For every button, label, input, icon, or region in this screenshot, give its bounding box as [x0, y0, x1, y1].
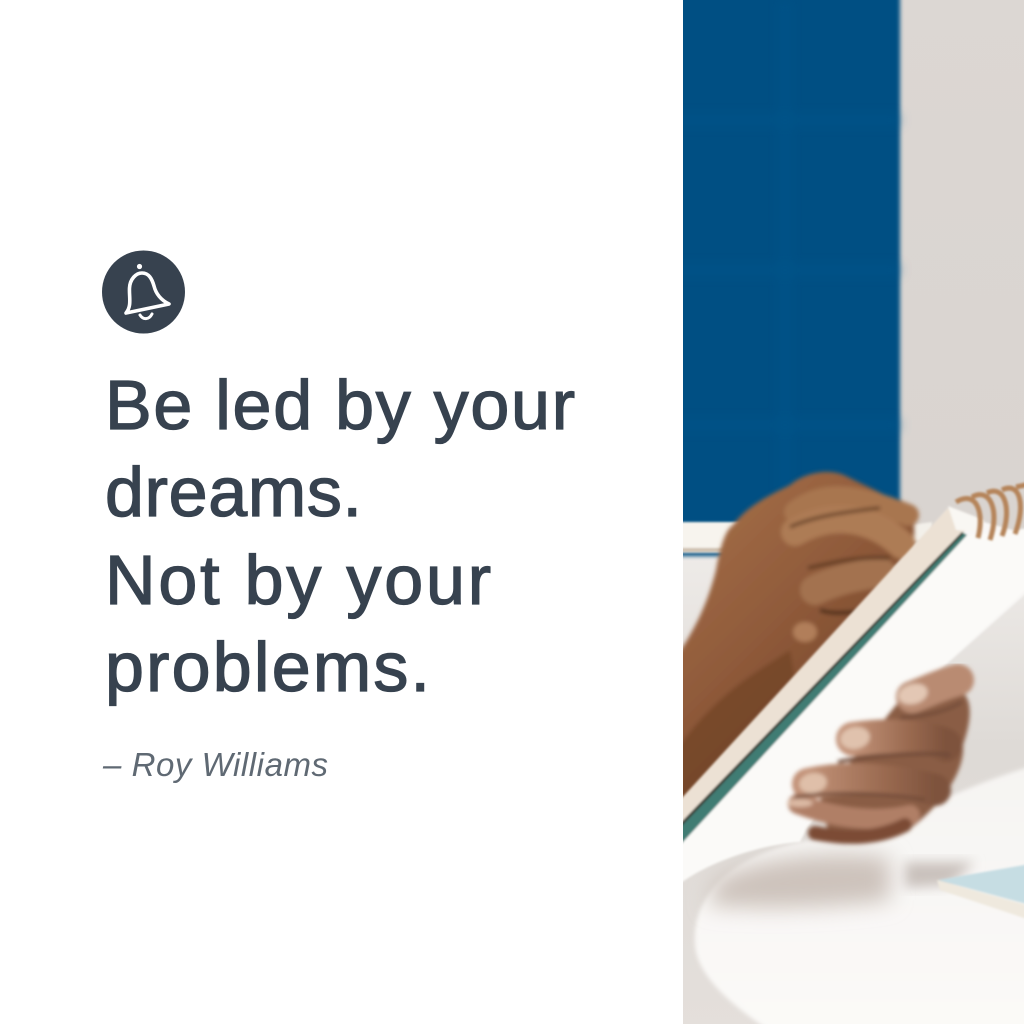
- quote heading: [105, 366, 575, 706]
- quote heading: problems.: [105, 628, 430, 706]
- photo backdrop: wall and blue panel: [670, 0, 1024, 1024]
- photo: hands writing in a notebook: [670, 0, 1024, 1024]
- notebook body: [670, 506, 1024, 890]
- quote heading: dreams.: [105, 453, 362, 531]
- round white table: [695, 764, 1024, 1024]
- index finger: [795, 497, 908, 515]
- writing hand: [670, 472, 915, 815]
- attribution: – Roy Williams: [102, 746, 328, 783]
- small notebook on table: [937, 864, 1024, 920]
- quote heading: Be led by your: [105, 366, 575, 444]
- pen: [670, 522, 932, 553]
- holding hand fingers: [787, 680, 970, 842]
- quote heading: Not by your: [105, 541, 491, 619]
- bell icon badge: [102, 250, 185, 334]
- notebook spiral binding: [956, 484, 1024, 540]
